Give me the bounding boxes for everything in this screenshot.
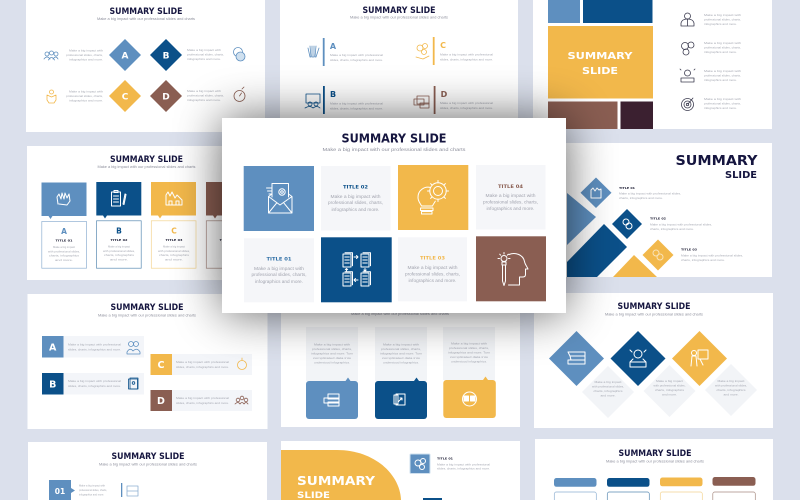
column 2: understood infographics.: [383, 360, 419, 364]
row C: slides, charts, infographics and more.: [176, 365, 229, 369]
icon list: [680, 13, 741, 110]
tile: title 02: professional slides, charts,: [328, 200, 383, 205]
column 1: understood infographics.: [314, 360, 350, 364]
column 3: infographics and more. Turn: [448, 350, 490, 354]
slide title: SUMMARY SLIDE: [618, 302, 690, 312]
column 1: Make a big impact with: [314, 342, 350, 346]
slide subtitle: Make a big impact with our professional slides and charts: [606, 460, 704, 464]
item B: Make a big impact with professional: [330, 102, 383, 106]
card B: TITLE 02: [110, 238, 128, 242]
diamond D: D: [162, 92, 170, 102]
item C: [416, 37, 493, 65]
slide: four cards: [27, 146, 267, 280]
text blocks: infographics and more.: [69, 58, 103, 62]
card C: Make a big impact: [163, 244, 185, 248]
yellow title block: SUMMARY: [568, 51, 633, 62]
item 01: charts, infographics and more.: [619, 196, 663, 200]
item text: TITLE 01: [437, 456, 453, 460]
tile: title 02: Make a big impact with: [330, 194, 381, 199]
text blocks: infographics and more.: [187, 57, 221, 61]
diamond A: A: [122, 51, 129, 61]
item 03: charts, infographics and more.: [681, 258, 725, 262]
tile: title 04: [476, 165, 546, 230]
row A: A: [49, 342, 57, 354]
card C: TITLE 03: [166, 238, 182, 242]
icon: people yellow: [47, 90, 56, 103]
card B: with professional slides,: [103, 249, 135, 253]
card B: [96, 182, 141, 268]
row D: D: [157, 396, 165, 407]
tile: title 02: TITLE 02: [343, 184, 368, 190]
yellow title block: [548, 26, 653, 98]
card C: and more.: [165, 258, 183, 262]
diamond A: [109, 39, 141, 71]
text blocks: professional slides, charts,: [66, 94, 103, 98]
slide title: SUMMARY: [676, 153, 758, 169]
item C: C: [440, 41, 446, 50]
item 03: Make a big impact with professional slides,: [681, 254, 743, 258]
navy block: [583, 0, 652, 23]
slide: four pills: [535, 439, 773, 500]
tile: head with pencil: [476, 236, 546, 301]
diamond B: [150, 39, 182, 71]
column 3: Make a big impact with: [451, 342, 487, 346]
slide subtitle: Make a big impact with our professional slides and charts: [350, 16, 448, 20]
icon list: Make a big impact with: [704, 13, 741, 17]
row D: slides, charts, infographics and more.: [176, 401, 229, 405]
pale text diamonds: [582, 364, 757, 418]
diamond D: [150, 80, 182, 112]
dark block: [620, 102, 653, 129]
card D: [206, 182, 251, 268]
tile: title 01: professional slides, charts,: [252, 272, 306, 277]
tile: title 01: TITLE 01: [266, 256, 292, 262]
diamond C: [109, 80, 141, 112]
icon list: professional slides, charts,: [704, 74, 741, 78]
text blocks: professional slides, charts,: [187, 52, 224, 56]
card C: with professional slides,: [158, 249, 190, 253]
card B: charts, infographics: [104, 253, 135, 257]
item B: [305, 86, 383, 114]
card A: A: [61, 227, 67, 236]
tile: title 03: infographics and more.: [408, 278, 456, 283]
icon list: Make a big impact with: [704, 69, 741, 73]
tile: title 03: professional slides, charts,: [405, 271, 460, 276]
yellow shape: [281, 450, 401, 500]
tile: envelope: [244, 166, 314, 231]
text blocks: Make a big impact with: [69, 90, 103, 94]
column 1: complicated data into: [313, 356, 351, 360]
row B: B: [49, 380, 56, 390]
main subtitle: Make a big impact with our professional slides and charts: [322, 147, 466, 152]
slide: speech bubbles: [281, 295, 520, 427]
slide subtitle: Make a big impact with our professional slides and charts: [97, 17, 195, 21]
slide title second line: SLIDE: [725, 170, 757, 181]
item 01: TITLE 01: [619, 186, 635, 190]
row D: [150, 390, 252, 411]
yellow title: SUMMARY: [297, 474, 375, 488]
icon list: Make a big impact with: [704, 97, 741, 101]
slide title: SUMMARY SLIDE: [110, 303, 184, 313]
item D: slides, charts, infographics and more.: [440, 106, 493, 110]
slide title: SUMMARY SLIDE: [112, 452, 184, 462]
tile: title 01: infographics and more.: [255, 279, 303, 284]
column 3: complicated data into: [450, 355, 488, 359]
row C: Make a big impact with professional: [176, 360, 229, 364]
card A: with professional slides,: [48, 249, 80, 253]
item text: slides, charts, infographics and more.: [437, 466, 490, 470]
tile: title 04: professional slides, charts,: [483, 199, 538, 204]
item 03: TITLE 03: [681, 248, 697, 252]
item text: [437, 456, 490, 470]
tile: documents cycle: [321, 237, 392, 302]
icon: coins: [234, 48, 245, 61]
item 02: Make a big impact with professional slides,: [650, 222, 712, 226]
item 02: [612, 209, 712, 239]
slide: colour blocks: [533, 0, 772, 129]
item 01: infographics and more.: [79, 492, 104, 496]
card D: TITLE 04: [220, 238, 236, 242]
row A: [42, 336, 144, 358]
column 2: infographics and more. Turn: [380, 352, 422, 356]
card A: TITLE 01: [56, 238, 72, 242]
pale text diamonds: with professional slides,: [654, 384, 686, 388]
pale text diamonds: with professional slides,: [592, 384, 624, 388]
card A: Make a big impact: [53, 245, 75, 249]
slide: three diamonds: [534, 293, 773, 428]
diamond yellow: [672, 331, 727, 386]
item 02: TITLE 02: [650, 216, 666, 220]
column 1: infographics and more. Turn: [311, 352, 353, 356]
card A: [42, 182, 86, 268]
slide: diamonds A B C D: [26, 0, 265, 132]
pale text diamonds: and more.: [662, 392, 677, 396]
icon: stopwatch: [234, 87, 245, 102]
item D: D: [441, 90, 448, 99]
tile: title 03: [398, 237, 467, 301]
pale text diamonds: charts, infographics: [655, 388, 685, 392]
card C: charts, infographics: [159, 253, 190, 257]
item C: Make a big impact with professional: [440, 52, 493, 56]
tile: title 03: TITLE 03: [420, 256, 445, 262]
item 01: [580, 178, 681, 208]
item 01: professional slides, charts,: [79, 488, 107, 492]
item 03: [642, 240, 743, 270]
pill blue: [554, 478, 596, 500]
text blocks: Make a big impact with: [69, 48, 103, 52]
pill yellow: [660, 478, 702, 500]
pale text diamonds: with professional slides,: [715, 384, 747, 388]
icon list: infographics and more.: [704, 106, 737, 110]
slide subtitle: Make a big impact with our professional slides and charts: [351, 312, 449, 316]
brown block: [548, 102, 618, 129]
tile: title 01: Make a big impact with: [254, 266, 305, 271]
item A: A: [330, 42, 337, 51]
tile: title 02: infographics and more.: [332, 207, 380, 212]
text blocks: professional slides, charts,: [187, 94, 224, 98]
diamond navy: [610, 331, 666, 386]
slide title: SUMMARY SLIDE: [362, 6, 436, 16]
item C: slides, charts, infographics and more.: [440, 58, 493, 62]
tile: title 03: Make a big impact with: [408, 265, 458, 270]
card C: [151, 182, 196, 268]
icon list: infographics and more.: [704, 22, 737, 26]
icon list: Make a big impact with: [704, 41, 741, 45]
text blocks: Make a big impact with: [187, 48, 221, 52]
slide subtitle: Make a big impact with our professional slides and charts: [605, 312, 703, 316]
column 2: complicated data into: [382, 356, 420, 360]
column 2: [375, 327, 427, 419]
slide title: SUMMARY SLIDE: [110, 7, 182, 17]
row C: C: [158, 360, 165, 371]
text blocks: infographics and more.: [187, 98, 221, 102]
slide: yellow quarter title: [281, 441, 520, 500]
card B: Make a big impact: [108, 244, 130, 248]
slide subtitle: Make a big impact with our professional slides and charts: [99, 462, 197, 466]
column 2: Make a big impact with: [383, 342, 419, 346]
slide title: SUMMARY SLIDE: [618, 449, 692, 459]
tile: title 02: [321, 166, 390, 230]
column 3: [443, 327, 496, 418]
pale text diamonds: Make a big impact: [718, 379, 745, 383]
text blocks: [66, 48, 224, 102]
slide subtitle: Make a big impact with our professional slides and charts: [98, 314, 196, 318]
row A: Make a big impact with professional: [68, 342, 121, 346]
slide subtitle: Make a big impact with our professional slides and charts: [98, 165, 196, 169]
slide title: SUMMARY SLIDE: [110, 155, 183, 165]
pill brown: [712, 477, 756, 500]
main slide: [222, 118, 566, 313]
tile: lightbulb and gear: [398, 165, 468, 230]
icon tile: [410, 454, 430, 474]
column 1: [306, 327, 358, 419]
pale text diamonds: and more.: [600, 394, 616, 398]
pale text diamonds: charts, infographics: [716, 388, 746, 392]
tile: title 01: [244, 238, 314, 302]
icon list: infographics and more.: [704, 78, 737, 82]
item 02: charts, infographics and more.: [650, 227, 694, 231]
card B: and more.: [110, 258, 128, 262]
pale text diamonds: and more.: [724, 392, 739, 396]
row B: slides, charts, infographics and more.: [68, 384, 121, 388]
slide: zig-zag colour tabs: [28, 294, 268, 429]
row B: Make a big impact with professional: [68, 379, 121, 383]
card A: charts, infographics: [49, 254, 80, 258]
tile: title 04: Make a big impact with: [486, 193, 536, 198]
row A: slides, charts, infographics and more.: [68, 348, 121, 352]
text blocks: Make a big impact with: [187, 89, 221, 93]
item A: [308, 38, 383, 66]
column 3: understood infographics.: [451, 360, 487, 364]
main title: SUMMARY SLIDE: [342, 132, 446, 147]
item B: B: [330, 90, 336, 99]
item A: slides, charts, infographics and more.: [330, 58, 383, 62]
pale text diamonds: Make a big impact: [656, 379, 683, 383]
diamond C: C: [122, 92, 129, 102]
text blocks: professional slides, charts,: [66, 53, 103, 57]
row B: [42, 373, 144, 394]
item B: slides, charts, infographics and more.: [330, 106, 383, 110]
card B: B: [116, 226, 122, 236]
item 01: 01: [55, 487, 65, 496]
item D: [414, 86, 493, 114]
item 01: Make a big impact with: [79, 484, 105, 488]
yellow title block: SLIDE: [582, 66, 618, 77]
item D: Make a big impact with professional: [440, 101, 493, 105]
item 01: Make a big impact with professional slides,: [619, 192, 681, 196]
pale text diamonds: Make a big impact: [594, 380, 622, 384]
row D: Make a big impact with professional: [176, 396, 229, 400]
column 2: professional slides, charts,: [381, 347, 421, 351]
icon list: infographics and more.: [704, 50, 737, 54]
item 01: [49, 480, 138, 500]
diamond blue: [549, 331, 604, 386]
tile: title 04: TITLE 04: [498, 184, 523, 190]
blue block: [548, 0, 580, 23]
icon list: professional slides, charts,: [704, 18, 741, 22]
item A: Make a big impact with professional: [330, 53, 383, 57]
big background shapes: [567, 193, 657, 277]
icon list: professional slides, charts,: [704, 102, 741, 106]
card C: C: [171, 226, 177, 236]
slide: numbered list: [28, 442, 267, 500]
diamond B: B: [163, 51, 170, 61]
slide: letter columns: [280, 0, 518, 119]
icon: team: [44, 51, 58, 60]
row C: [150, 354, 252, 375]
item text: Make a big impact with professional: [437, 462, 490, 466]
navy tile: [423, 498, 442, 500]
text blocks: infographics and more.: [69, 98, 103, 102]
tile: title 04: infographics and more.: [486, 206, 534, 211]
icon list: professional slides, charts,: [704, 46, 741, 50]
pill navy: [607, 478, 650, 500]
pale text diamonds: charts, infographics: [594, 389, 623, 393]
column 1: professional slides, charts,: [312, 347, 352, 351]
column 3: professional slides, charts,: [449, 346, 489, 350]
card A: and more.: [55, 258, 73, 262]
slide: staggered diamonds title: [534, 143, 772, 277]
